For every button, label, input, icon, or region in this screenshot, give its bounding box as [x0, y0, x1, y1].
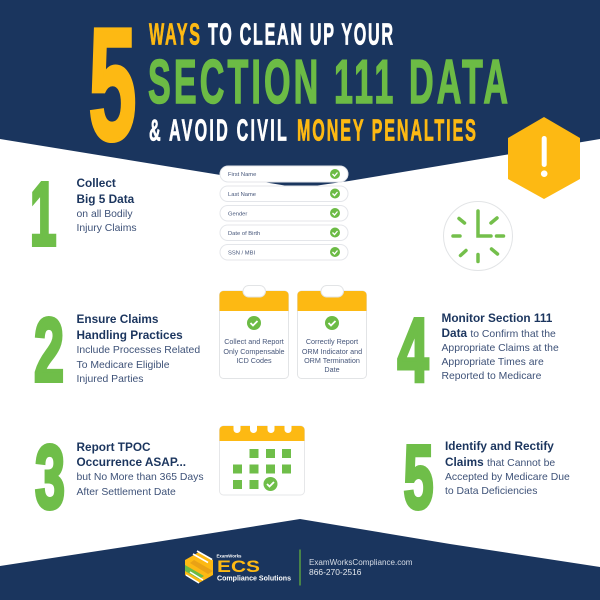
- step 5 text: Claims that Cannot be: [445, 455, 555, 469]
- title line 3: & AVOID CIVIL: [149, 114, 287, 148]
- icon: calendar: [220, 425, 304, 495]
- field: date of birth: Date of Birth: [228, 231, 260, 237]
- clipboard card 2: ORM Termination: [304, 356, 360, 365]
- step 4 text: Monitor Section 111: [442, 311, 553, 325]
- field: SSN / MBI: SSN / MBI: [228, 250, 255, 256]
- step 1 text: Collect: [76, 176, 116, 190]
- step 3 text: [76, 440, 204, 498]
- logo tagline: Compliance Solutions: [217, 574, 291, 582]
- icon: clock: [444, 202, 512, 270]
- clipboard card 1: Only Compensable: [223, 347, 285, 356]
- title line 1: TO CLEAN UP YOUR: [208, 18, 393, 52]
- clipboard card 1: [220, 286, 288, 378]
- step 2 number: 2: [34, 300, 64, 400]
- field: first name: First Name: [228, 172, 256, 178]
- step 3 text: but No More than 365 Days: [76, 472, 204, 483]
- step 1 text: on all Bodily: [76, 209, 133, 220]
- logo: [185, 551, 291, 583]
- clipboard card 1: ICD Codes: [236, 356, 272, 365]
- step 4 text: Appropriate Times are: [442, 357, 544, 368]
- step 5 text: to Data Deficiencies: [445, 486, 537, 497]
- step 2 text: [76, 312, 200, 385]
- logo ECS: ECS: [217, 557, 260, 576]
- step 3 text: Occurrence ASAP...: [76, 455, 186, 469]
- step 1 text: Big 5 Data: [76, 192, 135, 206]
- logo mark: [185, 551, 213, 583]
- clipboard card 2: ORM Indicator and: [302, 347, 362, 356]
- step 3 number: 3: [35, 427, 65, 527]
- clipboard card 2: Date: [324, 365, 340, 374]
- step 4 text: Reported to Medicare: [442, 371, 542, 382]
- step 2 text: Injured Parties: [76, 374, 144, 385]
- field: gender: Gender: [228, 212, 247, 218]
- step 2 text: Ensure Claims: [76, 312, 159, 326]
- clipboard card 1: Collect and Report: [224, 337, 284, 346]
- step 5 text: Accepted by Medicare Due: [445, 472, 570, 483]
- step 5 number: 5: [404, 427, 434, 527]
- step 2 text: To Medicare Eligible: [76, 360, 170, 371]
- contact phone: 866-270-2516: [309, 568, 362, 577]
- step 4 text: Data to Confirm that the: [442, 326, 556, 340]
- step 1 number: 1: [30, 165, 57, 265]
- clipboard card 2: Correctly Report: [306, 337, 358, 346]
- step 5 text: Identify and Rectify: [445, 439, 554, 453]
- step 4 text: [442, 311, 559, 382]
- title: [88, 0, 508, 174]
- field: last name: Last Name: [228, 192, 256, 198]
- clipboard card 2: [298, 286, 366, 378]
- header background: [0, 0, 600, 188]
- title line 1: WAYS: [149, 18, 200, 52]
- step 3 text: After Settlement Date: [76, 487, 176, 498]
- title line 3: MONEY PENALTIES: [297, 114, 476, 148]
- divider: [299, 550, 301, 586]
- step 2 text: Handling Practices: [76, 328, 183, 342]
- step 2 text: Include Processes Related: [76, 345, 200, 356]
- step 1 text: [76, 176, 137, 234]
- title line 2: SECTION 111 DATA: [148, 47, 508, 117]
- footer background: [0, 519, 600, 600]
- step 4 number: 4: [398, 299, 429, 400]
- step 5 text: [445, 439, 570, 497]
- step 4 text: Appropriate Claims at the: [442, 343, 559, 354]
- form fields: [220, 166, 348, 260]
- title line 3: [149, 114, 476, 148]
- logo small text: ExamWorks: [216, 554, 242, 558]
- step 1 text: Injury Claims: [76, 223, 137, 234]
- big numeral 5: 5: [88, 0, 137, 174]
- step 3 text: Report TPOC: [76, 440, 151, 454]
- contact website: ExamWorksCompliance.com: [309, 558, 413, 567]
- icon: warning hexagon: [508, 117, 580, 199]
